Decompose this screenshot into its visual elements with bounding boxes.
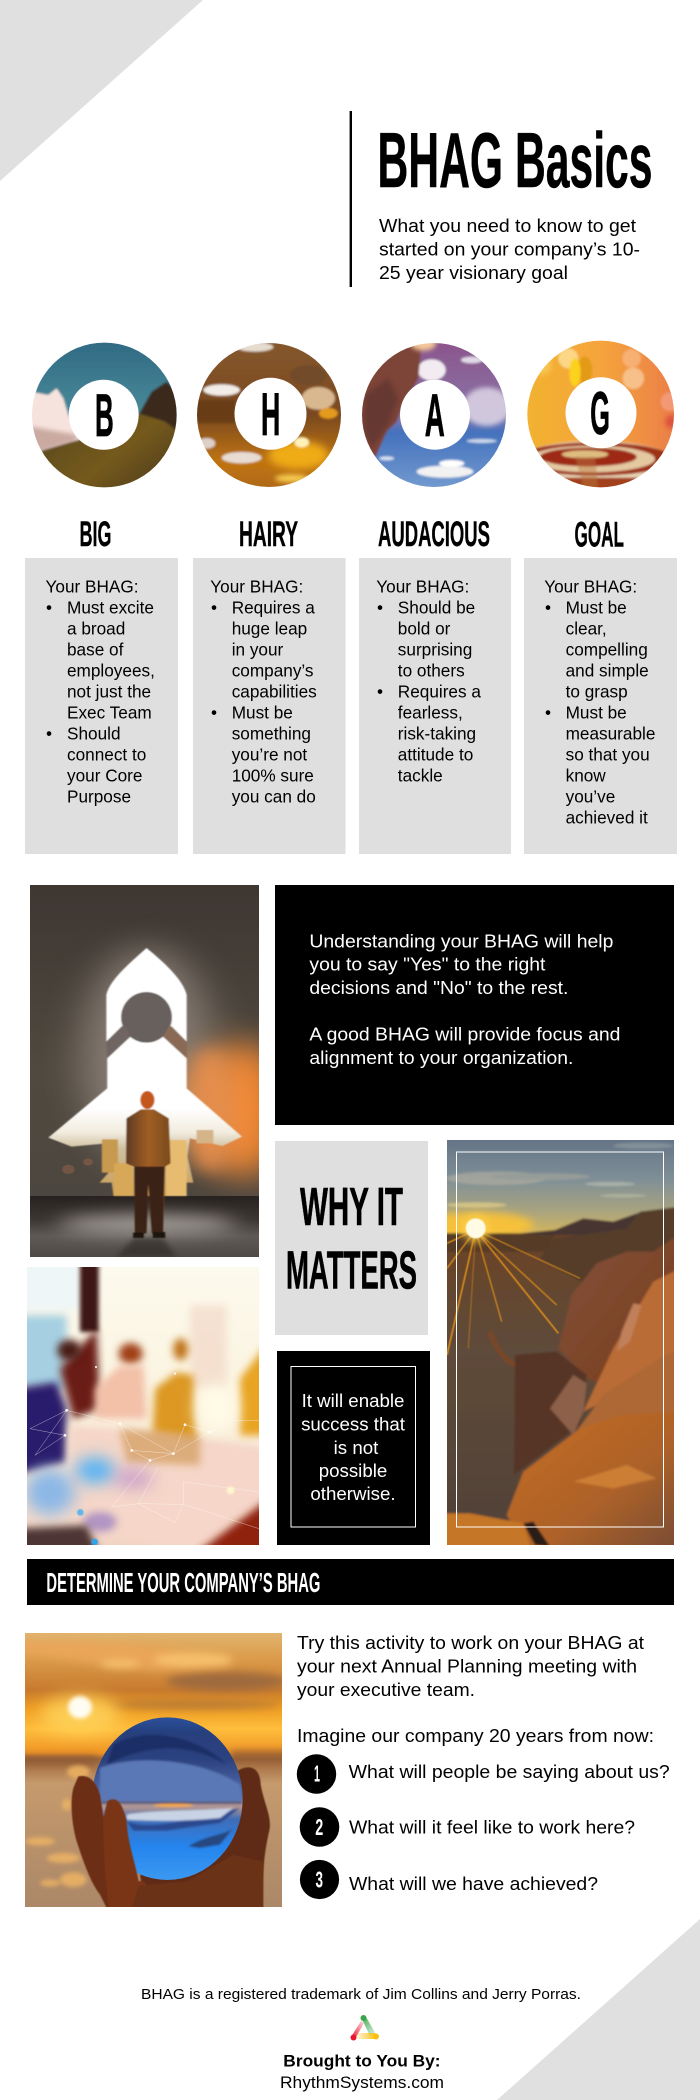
bullets: Goal: clear, <box>566 619 607 639</box>
circle image: B, mountain <box>32 342 177 488</box>
bullets: Goal: • <box>545 703 551 723</box>
text: activity introduction: your executive team. <box>297 1679 475 1700</box>
bullets: Hairy: Requires a <box>232 598 315 618</box>
bullets: Goal: achieved it <box>566 808 648 828</box>
bullets: Big: connect to <box>67 745 146 765</box>
photo: crystal ball held at sunset <box>25 1633 282 1907</box>
bullets: Hairy: Your BHAG: <box>210 577 303 597</box>
bullets: Big: Should <box>67 724 121 744</box>
number badge 3 <box>300 1860 339 1899</box>
bullets: Goal: so that you <box>566 745 650 765</box>
letter badge: B: B <box>95 382 114 449</box>
bullets: Hairy: you’re not <box>232 745 307 765</box>
question 1 <box>297 1754 670 1794</box>
number badge 1 <box>297 1754 336 1794</box>
text: yes and no: decisions and "No" to the rest. <box>309 977 568 998</box>
bullets: Big: • <box>46 724 52 744</box>
bullets: Goal: and simple <box>566 661 649 681</box>
panel: Audacious <box>359 558 511 854</box>
bullets: Hairy: you can do <box>232 787 316 807</box>
decorative corner triangle: bottom right <box>497 1919 700 2100</box>
bullets: Big: a broad <box>67 619 125 639</box>
photo: blurred team with network overlay <box>27 1267 259 1545</box>
column: Goal <box>524 516 677 854</box>
text: activity introduction: Try this activity to work on your BHAG at <box>297 1632 645 1653</box>
circle image: G, dart and target <box>527 340 674 488</box>
bullets: Hairy: huge leap <box>232 619 307 639</box>
column: Audacious <box>359 515 511 854</box>
callout text: success that <box>301 1414 406 1434</box>
bullets: Hairy: capabilities <box>232 682 317 702</box>
subtitle: What you need to know to get <box>379 215 637 236</box>
bullets: Audacious: Requires a <box>398 682 481 702</box>
footer: trademark note: BHAG is a registered trademark of Jim Collins and Jerry Porras. <box>141 1987 581 2003</box>
text: yes and no: Understanding your BHAG will help <box>309 930 613 951</box>
bullets: Goal: Your BHAG: <box>544 577 637 597</box>
panel: why it matters <box>275 1141 428 1335</box>
bullets: Audacious: Should be <box>398 598 475 618</box>
question text 2: What will it feel like to work here? <box>349 1816 635 1838</box>
bullets: Audacious: • <box>377 598 383 618</box>
bullets: Audacious: bold or <box>398 619 451 639</box>
callout frame <box>291 1366 416 1527</box>
heading: Audacious: AUDACIOUS <box>378 515 490 554</box>
bullets: Goal: know <box>566 766 606 786</box>
subtitle: started on your company’s 10- <box>379 238 640 260</box>
letter badge: A: A <box>425 382 445 449</box>
text: yes and no: A good BHAG will provide focus and <box>309 1023 620 1044</box>
question 2 <box>300 1807 635 1847</box>
bullets: Big: your Core <box>67 766 142 786</box>
bullets: Hairy: something <box>232 724 311 744</box>
bullets: Big: Purpose <box>67 787 131 807</box>
panel: Goal <box>524 558 677 854</box>
subtitle: 25 year visionary goal <box>379 262 568 283</box>
footer: credit: Brought to You By: <box>283 2052 441 2071</box>
number badge 3: 3 <box>316 1866 323 1892</box>
question 3 <box>300 1860 598 1899</box>
column: Hairy <box>193 515 346 854</box>
bullets: Hairy: Must be <box>232 703 293 723</box>
banner: determine your company's BHAG <box>27 1559 674 1605</box>
letter badge: A <box>400 380 470 450</box>
bullets: Hairy: company’s <box>232 661 314 681</box>
bullets: Audacious: Your BHAG: <box>376 577 469 597</box>
callout text: possible <box>319 1460 387 1481</box>
bullets: Big: base of <box>67 640 124 660</box>
circle image: A, cliff and sky <box>362 343 506 487</box>
bullets: Goal: you’ve <box>566 787 615 807</box>
bullets: Hairy: • <box>211 598 217 618</box>
bullets: Goal: measurable <box>566 724 655 744</box>
bullets: Hairy: in your <box>232 640 284 660</box>
circle image: H, light bulbs on wood <box>197 343 341 487</box>
bullets: Goal: • <box>545 598 551 618</box>
panel: Hairy <box>193 558 346 854</box>
text: yes and no: you to say "Yes" to the right <box>309 954 546 974</box>
decorative corner triangle: top left <box>0 0 203 181</box>
bullets: Audacious: attitude to <box>398 745 473 765</box>
callout text: It will enable <box>302 1390 404 1411</box>
bullets: Audacious: • <box>377 682 383 702</box>
letter badge: B <box>69 380 139 450</box>
callout text: otherwise. <box>310 1483 396 1504</box>
bullets: Big: Exec Team <box>67 703 152 723</box>
bullets: Big: employees, <box>67 661 155 681</box>
panel: success callout <box>277 1351 430 1545</box>
text: activity introduction: Imagine our company 20 years from now: <box>297 1725 654 1746</box>
question text 1: What will people be saying about us? <box>349 1761 670 1782</box>
bullets: Audacious: to others <box>398 661 465 681</box>
bullets: Big: Must excite <box>67 598 154 618</box>
question text 3: What will we have achieved? <box>349 1873 598 1894</box>
letter badge: G: G <box>590 380 610 447</box>
bullets: Hairy: • <box>211 703 217 723</box>
bullets: Big: • <box>46 598 52 618</box>
number badge 2 <box>300 1807 339 1847</box>
bullets: Audacious: risk-taking <box>398 724 476 744</box>
text: activity introduction: your next Annual Planning meeting with <box>297 1656 637 1676</box>
heading: Big: BIG <box>80 515 112 554</box>
text: yes and no: alignment to your organization. <box>309 1047 573 1068</box>
bullets: Big: Your BHAG: <box>46 577 138 597</box>
bullets: Goal: compelling <box>566 640 648 660</box>
bullets: Big: not just the <box>67 682 151 702</box>
bullets: Goal: Must be <box>566 703 627 723</box>
heading: why it matters: WHY IT <box>300 1177 403 1237</box>
bullets: Goal: to grasp <box>566 682 628 702</box>
letter badge: H <box>234 378 306 450</box>
bullets: Audacious: tackle <box>398 766 443 786</box>
bullets: Audacious: surprising <box>398 640 472 660</box>
letter badge: H: H <box>261 381 280 448</box>
column: Big <box>25 515 178 854</box>
letter badge: G <box>566 377 636 448</box>
number badge 1: 1 <box>314 1760 320 1786</box>
photo: man facing rocket-shaped doorway <box>30 885 259 1257</box>
panel: Big <box>25 558 178 854</box>
heading: Hairy: HAIRY <box>239 515 298 554</box>
number badge 2: 2 <box>315 1814 323 1840</box>
footer: credit: RhythmSystems.com <box>280 2073 444 2092</box>
callout text: is not <box>334 1437 379 1458</box>
banner heading: DETERMINE YOUR COMPANY’S BHAG <box>46 1567 320 1598</box>
header block <box>350 111 652 287</box>
photo: canyon at sunset <box>447 1140 674 1545</box>
header rule <box>350 111 352 287</box>
photo frame: white outline <box>456 1152 664 1527</box>
panel: understanding your BHAG <box>275 885 674 1125</box>
bullets: Audacious: fearless, <box>398 703 463 723</box>
column: Goal: GOAL <box>574 516 624 555</box>
bullets: Goal: Must be <box>566 598 627 618</box>
bullets: Hairy: 100% sure <box>232 766 314 786</box>
heading: why it matters: MATTERS <box>286 1240 417 1300</box>
logo: Rhythm Systems triangle <box>350 2015 379 2040</box>
